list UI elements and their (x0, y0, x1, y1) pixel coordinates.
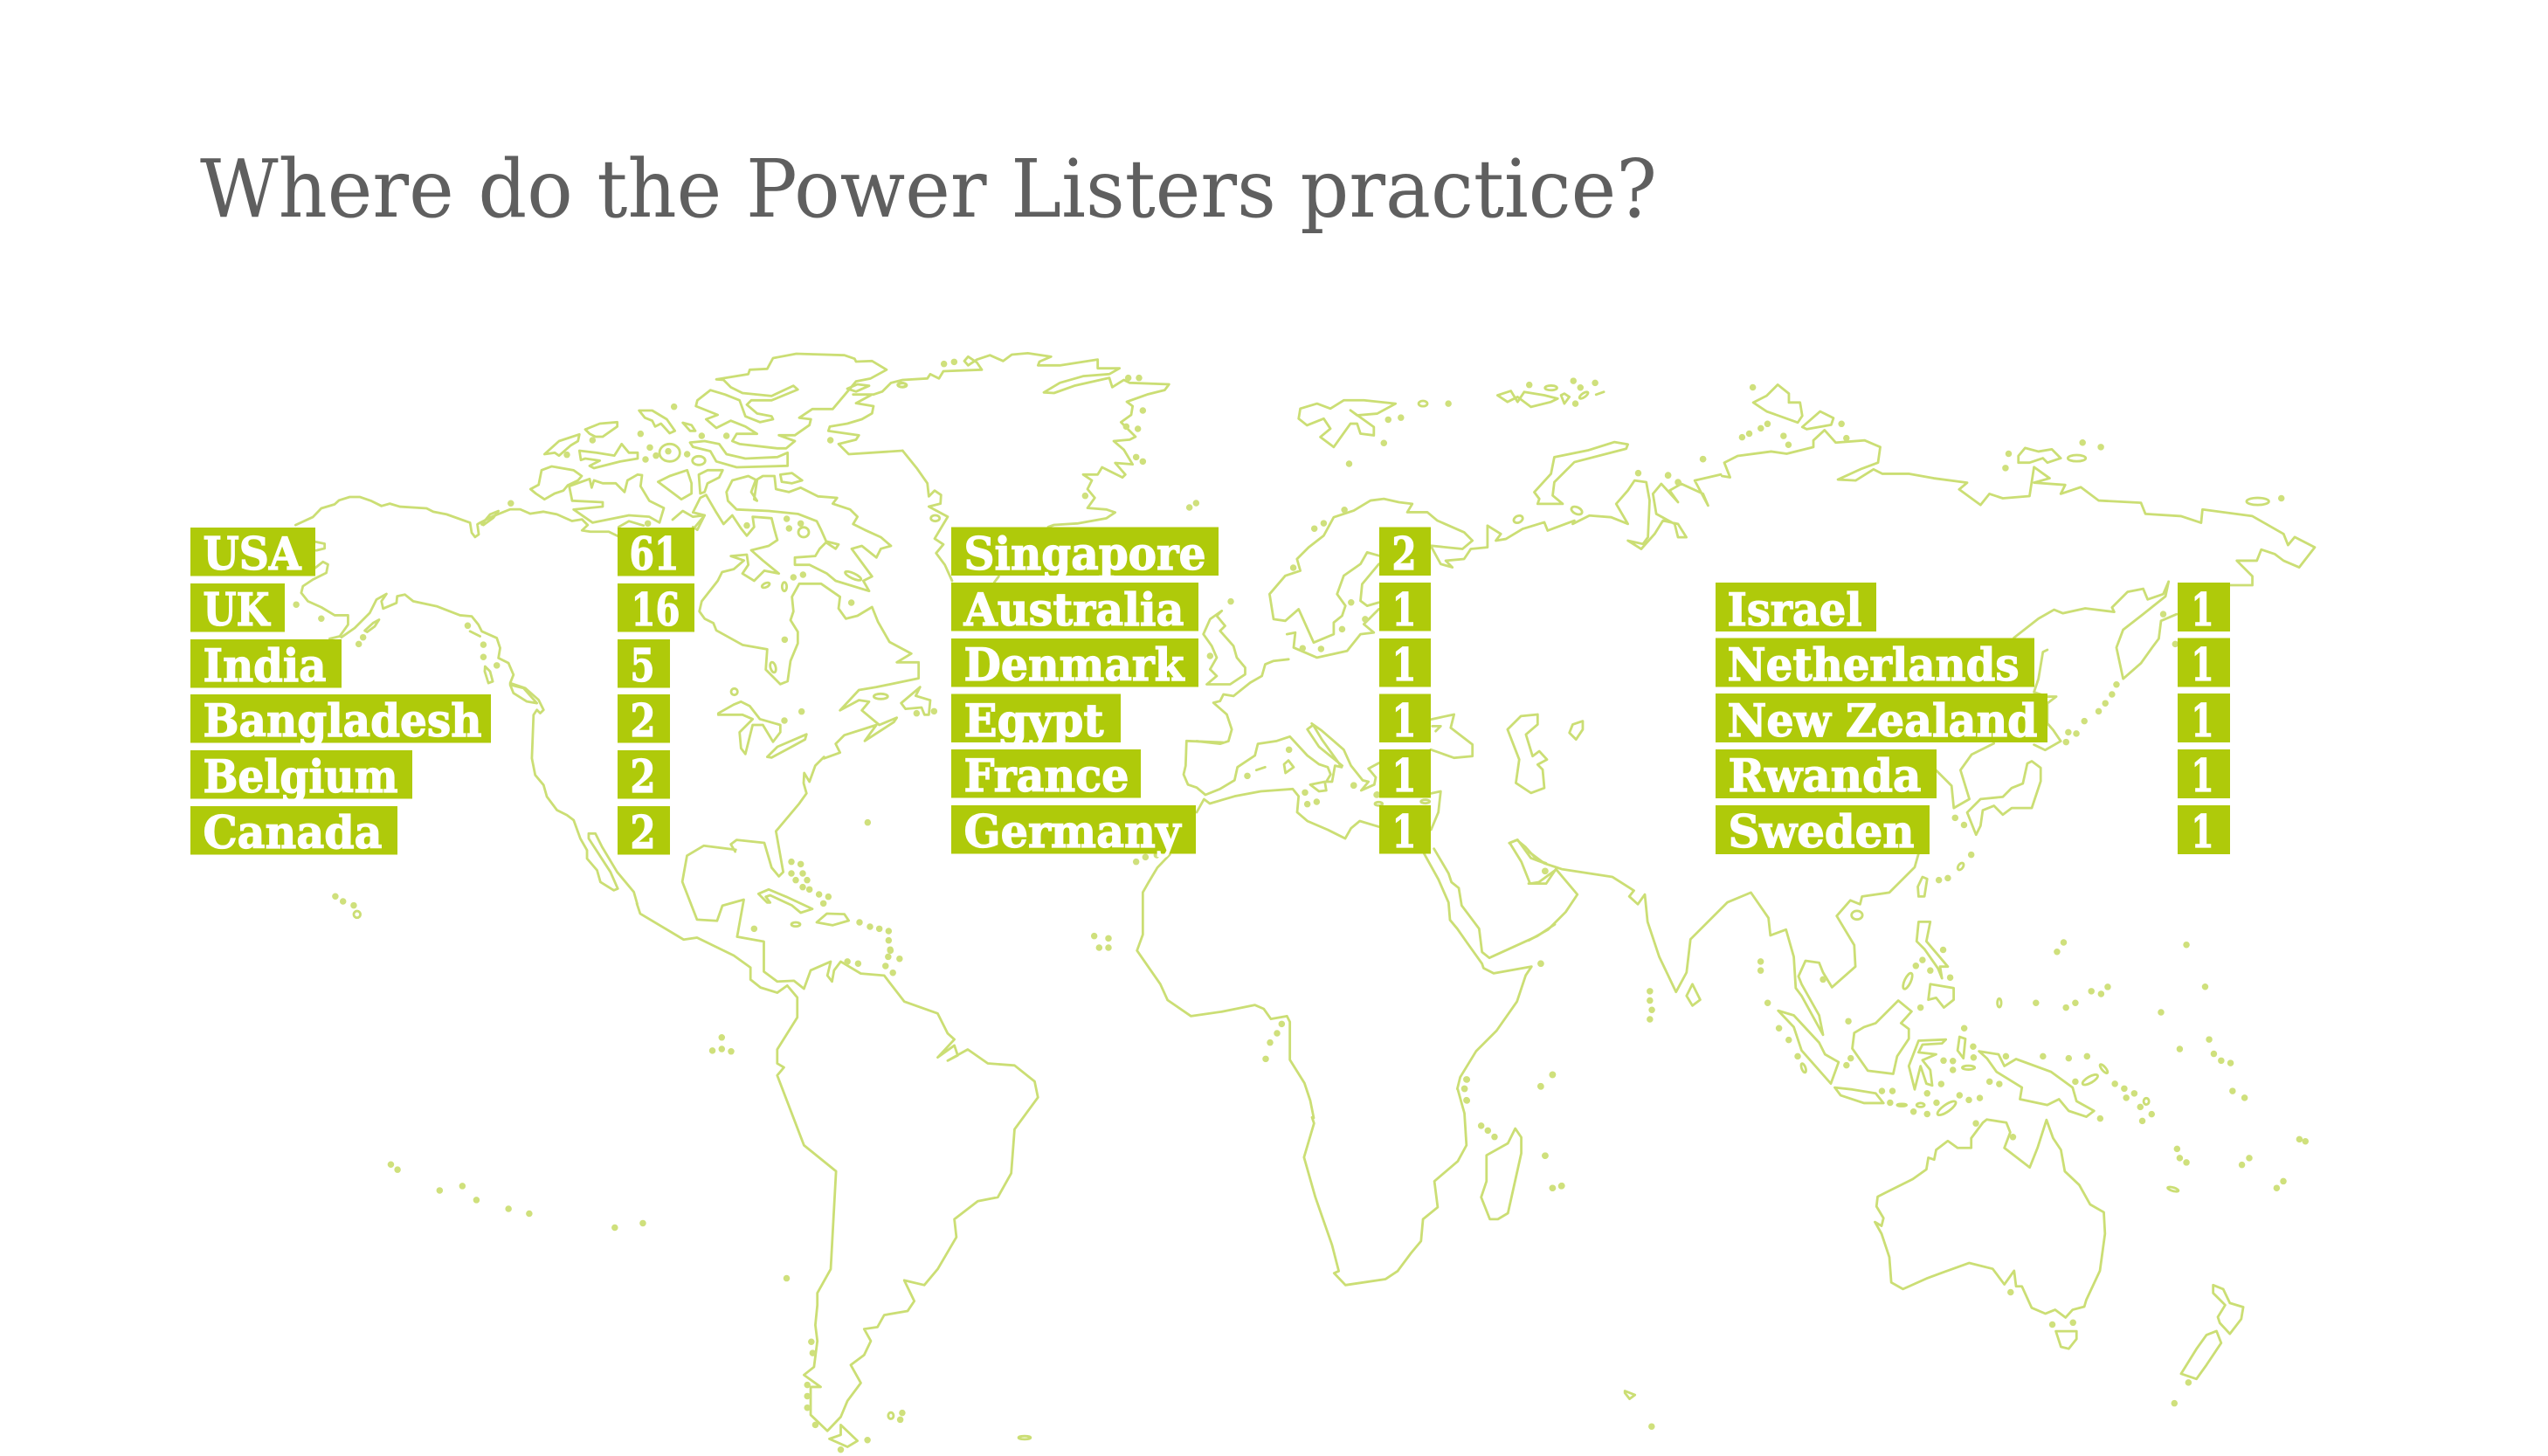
row: UK: UK (203, 584, 271, 637)
row: Australia: Australia (963, 584, 1184, 637)
row: France (951, 749, 1431, 803)
row: UK: 16 (631, 584, 680, 637)
map: Siberia and Far East (1668, 384, 2315, 835)
row: Germany: Germany (964, 806, 1182, 859)
table: first column of countries and counts (190, 528, 694, 859)
row: Netherlands: Netherlands (1728, 639, 2020, 692)
row: Rwanda: 1 (2191, 750, 2213, 803)
row: Singapore: Singapore (964, 528, 1205, 581)
row: Sweden (1716, 805, 2230, 859)
row: USA: 61 (629, 528, 680, 581)
row: Denmark (951, 638, 1431, 692)
row: Belgium: Belgium (203, 751, 398, 804)
row: Israel: Israel (1728, 584, 1862, 637)
row: Sweden: Sweden (1728, 806, 1915, 859)
map: Canadian Arctic and eastern North America (530, 354, 934, 758)
row: France: 1 (1392, 750, 1417, 803)
row: Egypt: Egypt (964, 695, 1104, 748)
world map outline (295, 353, 2315, 1450)
row: Sweden: 1 (2191, 806, 2213, 859)
row: Australia (951, 583, 1431, 637)
map: Central and South America (390, 845, 1398, 1450)
row: Australia: 1 (1392, 584, 1417, 637)
row: Germany (951, 805, 1431, 859)
row: India (190, 639, 670, 693)
row: Israel (1716, 583, 2230, 637)
row: India: India (203, 640, 327, 693)
table: second column of countries and counts (951, 528, 1431, 859)
table: third column of countries and counts (1716, 583, 2230, 859)
row: Rwanda: Rwanda (1728, 750, 1922, 803)
row: Denmark: Denmark (964, 639, 1185, 692)
row: Canada (190, 806, 670, 859)
row: Bangladesh: 2 (631, 695, 655, 748)
map: East Africa, Madagascar, New Zealand and Pacific islands (1398, 945, 2305, 1426)
row: Netherlands: 1 (2191, 639, 2213, 692)
row: USA (190, 528, 694, 581)
row: New Zealand (1716, 693, 2230, 748)
row: Rwanda (1716, 749, 2230, 803)
row: Denmark: 1 (1392, 639, 1417, 692)
map: eastern USA and Caribbean (731, 757, 1108, 950)
map: Greenland (853, 353, 1196, 583)
row: Canada: Canada (203, 807, 383, 859)
map: Europe and northern Russia (1197, 381, 1721, 863)
title: Where do the Power Listers practice? (200, 142, 1657, 236)
row: Netherlands (1716, 638, 2230, 692)
row: New Zealand: 1 (2191, 695, 2213, 748)
row: Israel: 1 (2191, 584, 2213, 637)
row: Germany: 1 (1392, 806, 1417, 859)
map: western North America (295, 497, 637, 918)
row: Belgium (190, 750, 670, 804)
row: France: France (964, 750, 1129, 803)
row: Singapore (951, 528, 1431, 581)
row: Singapore: 2 (1392, 528, 1417, 581)
map: Africa and Mediterranean (1136, 723, 1555, 1118)
row: Bangladesh (190, 694, 670, 748)
row: Egypt (951, 693, 1431, 748)
row: Egypt: 1 (1392, 695, 1417, 748)
row: Belgium: 2 (631, 751, 655, 804)
map: South Asia, South-East Asia and Australia (1529, 852, 2109, 1349)
row: New Zealand: New Zealand (1728, 695, 2037, 748)
row: Canada: 2 (631, 807, 655, 859)
row: USA: USA (203, 528, 301, 581)
row: Bangladesh: Bangladesh (203, 695, 482, 748)
row: India: 5 (631, 640, 655, 693)
row: UK (190, 583, 694, 637)
